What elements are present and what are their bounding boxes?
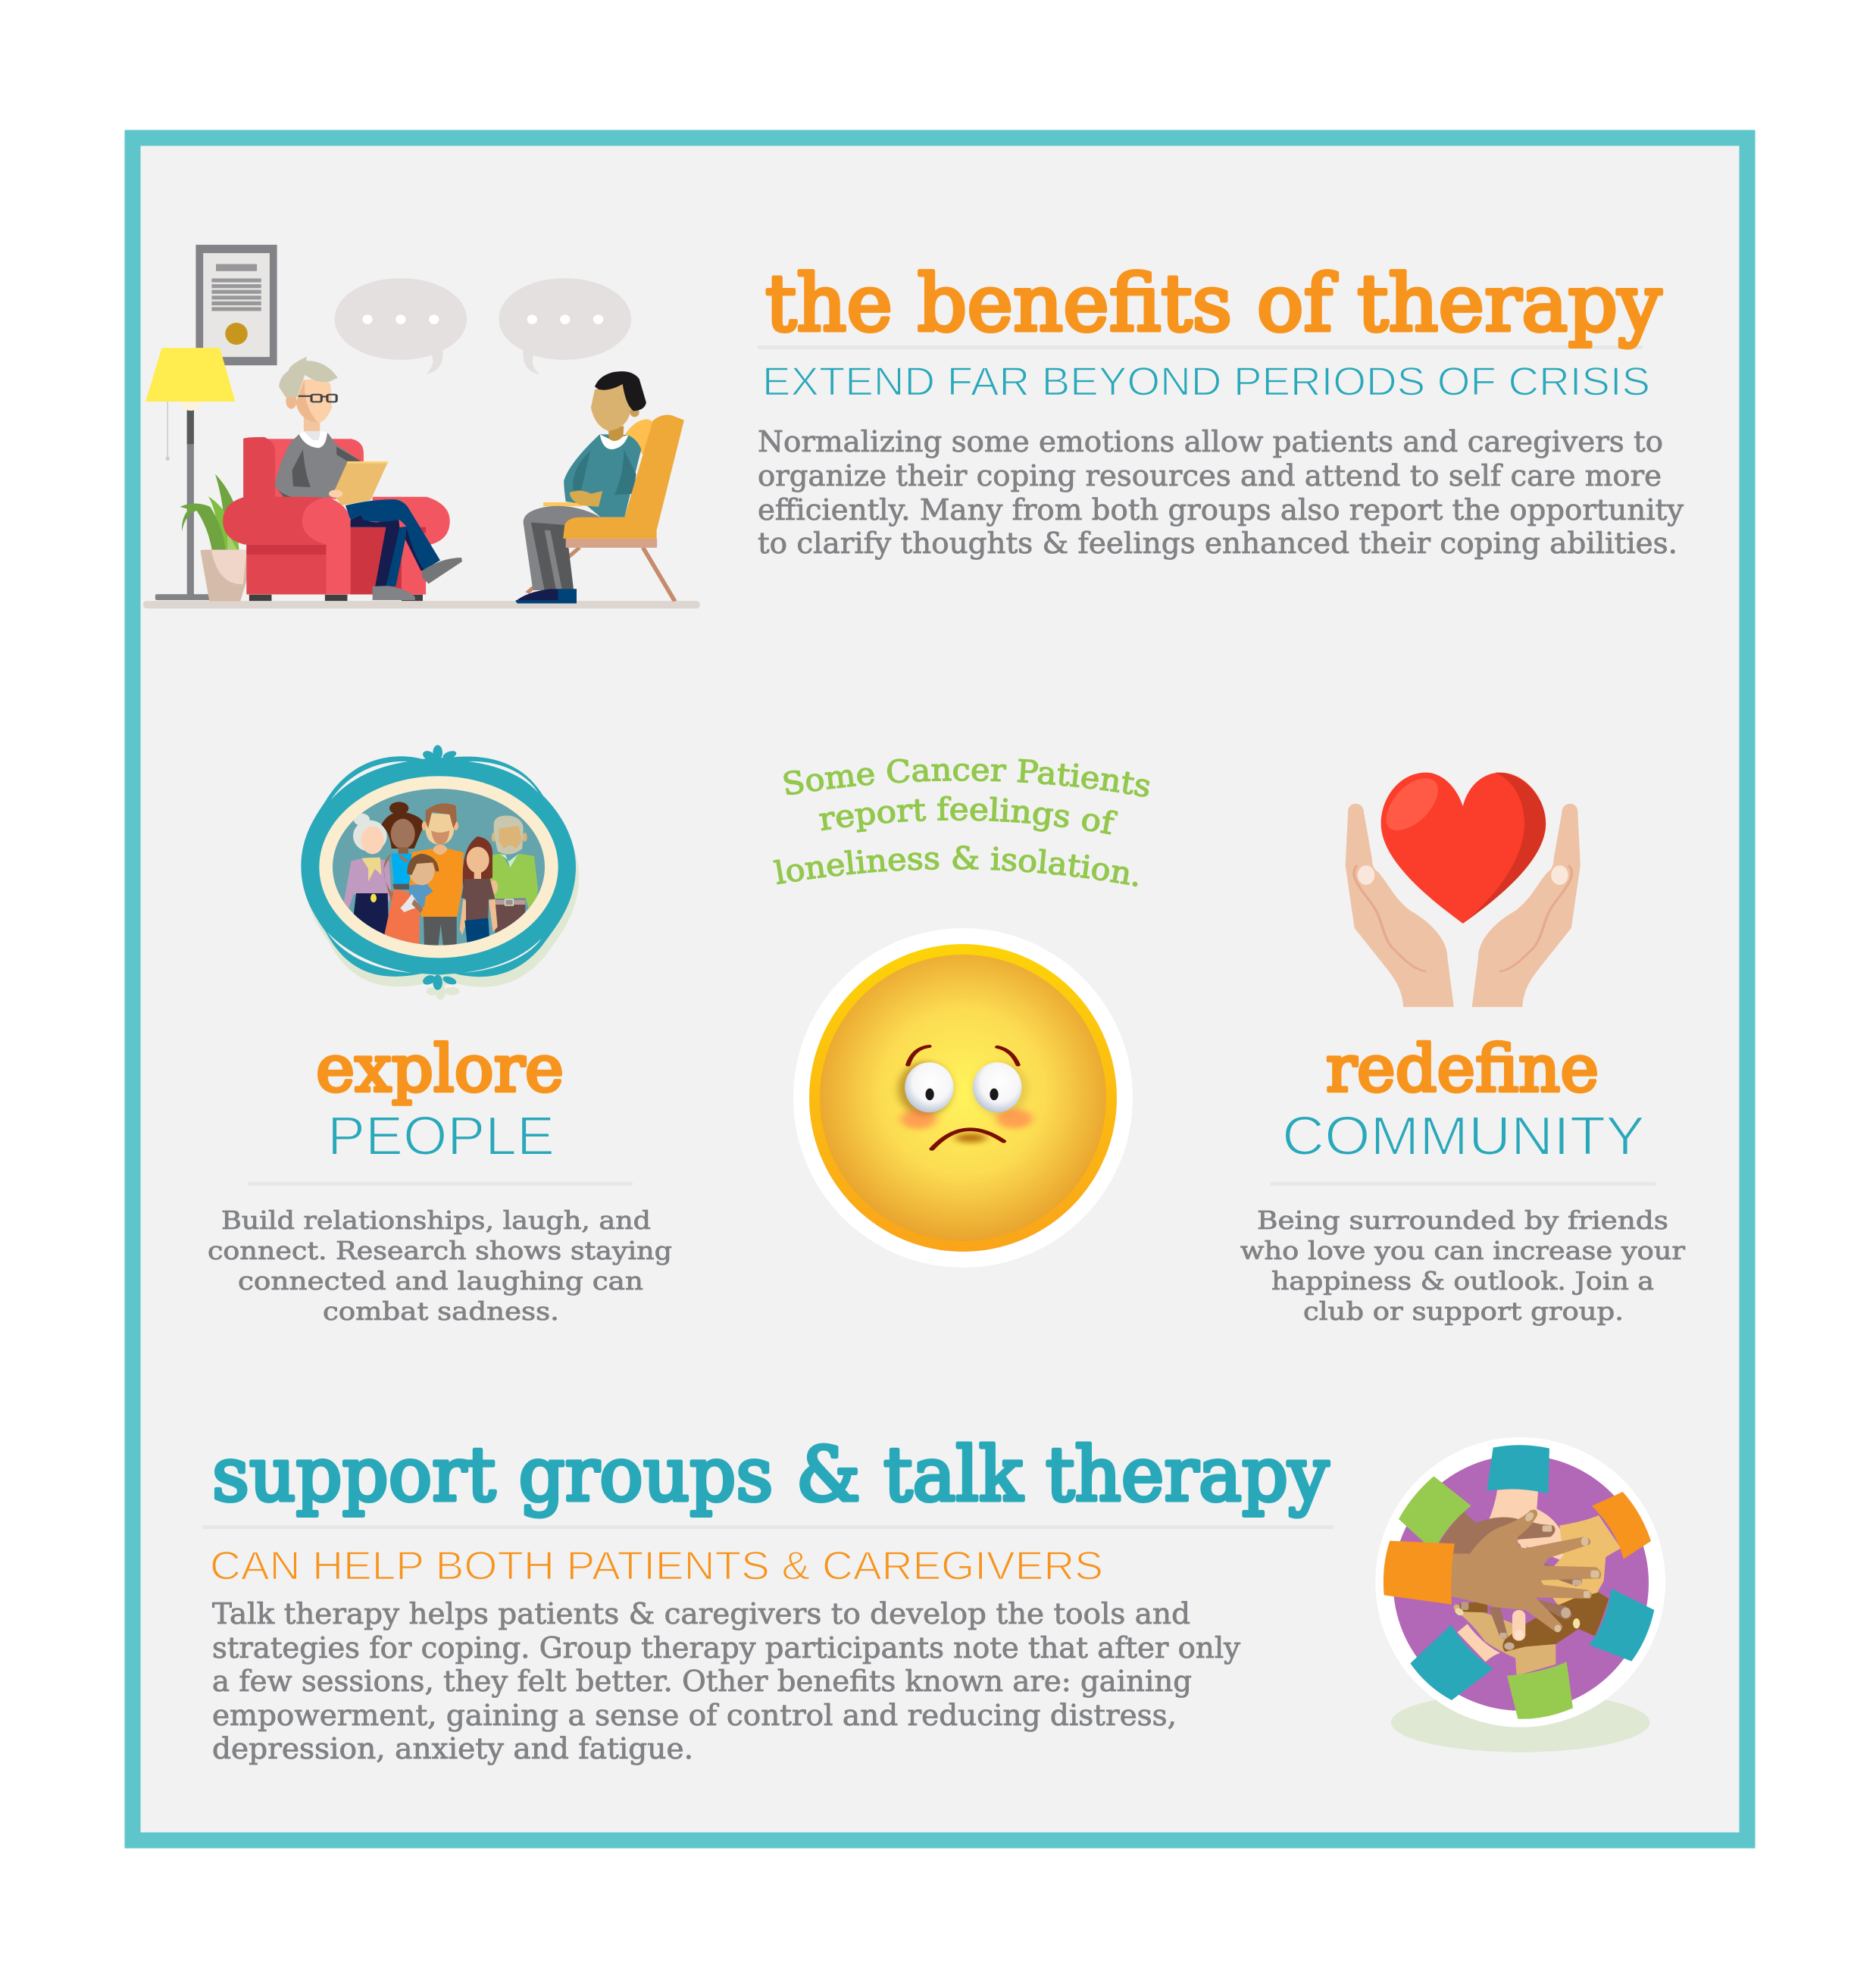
icon: teen girl (460, 836, 498, 945)
icon: framed certificate (195, 245, 277, 365)
subtitle: extend far beyond: EXTEND FAR BEYOND PERIODS OF CRISIS (762, 359, 1650, 405)
text block: redefine community: who love you can increase your (1240, 1236, 1685, 1265)
divider: explore rule (248, 1182, 633, 1186)
icon: ground shadow (1391, 1693, 1649, 1752)
text block: normalizing emotions: to clarify thoughts & feelings enhanced their coping abilities. (758, 527, 1677, 560)
callout: curved green text (773, 758, 1150, 886)
icon: potted plant (180, 474, 247, 602)
icon: floor strip (143, 601, 700, 608)
text block: talk therapy: empowerment, gaining a sense of control and reducing distress, (212, 1699, 1177, 1732)
title: the benefits of therapy: the benefits of therapy (765, 258, 1662, 349)
illustration: therapy session (143, 245, 700, 608)
heading: explore: explore (316, 1032, 564, 1107)
icon: heart (1381, 773, 1546, 924)
illustration: family portrait in oval frame (301, 745, 579, 1000)
text block: talk therapy: depression, anxiety and fatigue. (212, 1732, 693, 1765)
text block: normalizing emotions: Normalizing some emotions allow patients and caregivers to (758, 425, 1663, 458)
heading: community: COMMUNITY (1282, 1106, 1645, 1167)
icon: client figure (515, 371, 646, 603)
text block: redefine community: Being surrounded by friends (1257, 1205, 1668, 1235)
illustration: stacked hands (1375, 1437, 1665, 1752)
icon: sad face emoji (793, 928, 1133, 1268)
divider: title rule (758, 345, 1643, 349)
icon: left hand (1346, 804, 1454, 1007)
icon: white disc (1375, 1437, 1665, 1727)
icon: right hand (1472, 804, 1581, 1007)
text block: talk therapy: strategies for coping. Group therapy participants note that after only (212, 1631, 1241, 1665)
icon: grandmother (343, 814, 392, 937)
text block: explore people: combat sadness. (323, 1296, 559, 1326)
divider: redefine rule (1271, 1182, 1656, 1186)
callout: curved green text: Some Cancer Patients (783, 758, 1150, 797)
divider: support rule (202, 1525, 1334, 1529)
text block: talk therapy: Talk therapy helps patients & caregivers to develop the tools and (212, 1597, 1190, 1630)
heading: people: PEOPLE (327, 1106, 555, 1167)
callout: curved green text: report feelings of (818, 796, 1118, 835)
icon: arms and hands (1440, 1489, 1621, 1676)
icon: frame shadow (304, 767, 579, 987)
icon: teal frame (301, 745, 576, 990)
icon: yellow chair (527, 419, 675, 602)
icon: portrait backdrop (333, 789, 545, 946)
icon: yellow chair front (563, 414, 684, 548)
text block: talk therapy (212, 1597, 1241, 1765)
text block: redefine community (1240, 1205, 1685, 1326)
icon: therapist figure (275, 357, 462, 600)
text block: explore people (208, 1205, 672, 1326)
page frame (133, 138, 1747, 1840)
text block: redefine community: happiness & outlook. Join a (1271, 1266, 1654, 1296)
heading: redefine: redefine (1326, 1032, 1599, 1107)
icon: speech bubble left (335, 278, 467, 374)
icon: child (400, 854, 439, 913)
text block: normalizing emotions: organize their coping resources and attend to self care more (758, 459, 1662, 492)
icon: sleeves (1384, 1445, 1654, 1719)
subtitle: can help both: CAN HELP BOTH PATIENTS & CAREGIVERS (210, 1544, 1103, 1588)
text block: redefine community: club or support group. (1303, 1296, 1624, 1326)
text block: explore people: Build relationships, laugh, and (221, 1205, 651, 1235)
illustration: family members (343, 802, 538, 947)
icon: floor lamp (145, 348, 236, 600)
icon: mother (381, 802, 424, 945)
icon: heart held in hands (1346, 773, 1581, 1007)
text block: explore people: connect. Research shows staying (208, 1236, 672, 1265)
icon: father (409, 803, 464, 947)
heading: support groups and talk therapy: support groups & talk therapy (212, 1432, 1330, 1518)
icon: grandfather (487, 815, 538, 937)
text block: normalizing emotions: efficiently. Many from both groups also report the opportunity (758, 493, 1684, 527)
icon: red armchair (223, 437, 450, 601)
text block: explore people: connected and laughing can (238, 1266, 643, 1296)
icon: purple disc (1393, 1455, 1649, 1711)
icon: speech bubble right (499, 278, 631, 374)
callout: curved green text: loneliness & isolation. (773, 846, 1138, 886)
text block: talk therapy: a few sessions, they felt better. Other benefits known are: gaining (212, 1665, 1192, 1698)
icon: cream mat (319, 776, 558, 958)
text block: normalizing emotions (758, 425, 1684, 560)
icon: frame flourish shadow (427, 983, 460, 1000)
